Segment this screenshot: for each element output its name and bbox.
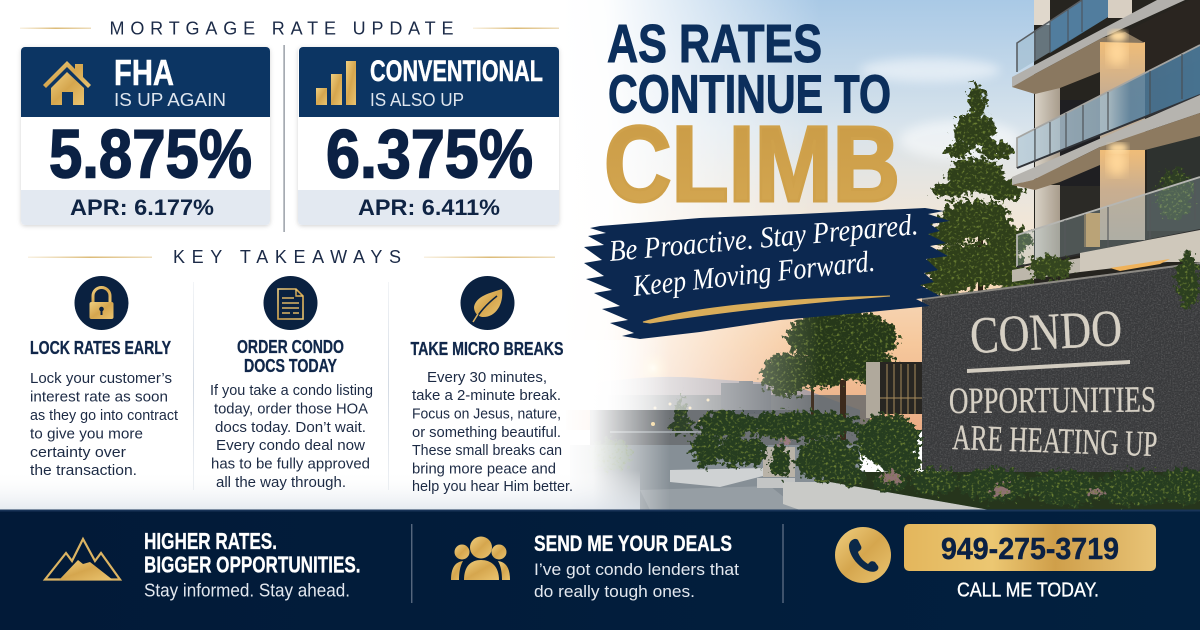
distant hills and city xyxy=(590,377,870,445)
text block: the transaction. xyxy=(30,462,137,479)
divider between cards xyxy=(284,45,285,232)
title: TAKE MICRO BREAKS xyxy=(410,339,564,359)
FHA APR: APR: 6.177% xyxy=(70,195,214,220)
sun xyxy=(636,351,670,385)
white fade: lower xyxy=(560,340,670,510)
icon: document xyxy=(264,276,318,330)
card: FHA xyxy=(21,47,270,225)
card: conventional xyxy=(298,47,559,225)
icon: padlock xyxy=(74,276,128,330)
sky xyxy=(560,0,1200,430)
bottom band xyxy=(0,510,1200,630)
band: call xyxy=(835,524,1156,602)
slab one xyxy=(1012,0,1185,87)
icon: bars xyxy=(316,61,356,105)
band: send me your deals xyxy=(451,531,739,601)
phone number box xyxy=(904,524,1156,571)
main title xyxy=(604,14,900,224)
conventional APR: APR: 6.411% xyxy=(358,195,500,220)
text block xyxy=(412,369,573,495)
subtext xyxy=(534,560,739,601)
stone monument wall xyxy=(922,262,1200,490)
column dividers xyxy=(193,282,194,490)
shrub by wall xyxy=(1028,256,1072,280)
photo: condo building at sunset xyxy=(560,0,1200,510)
white fade: upper xyxy=(560,0,820,410)
band: higher rates xyxy=(45,528,360,600)
subtext: do really tough ones. xyxy=(534,582,695,601)
top balcony xyxy=(1017,0,1108,72)
takeaway: take micro breaks xyxy=(410,276,573,495)
text block: all the way through. xyxy=(216,474,346,491)
left column backdrop xyxy=(0,0,566,510)
wall text: condo: CONDO xyxy=(969,300,1123,365)
piers xyxy=(1035,88,1060,178)
icon: leaf xyxy=(460,276,514,330)
text block: docs today. Don’t wait. xyxy=(215,419,366,436)
hedges and flowers xyxy=(588,411,1200,506)
lower windows xyxy=(1060,186,1100,256)
heading: key takeaways: KEY TAKEAWAYS xyxy=(173,247,401,267)
conventional subtitle: IS ALSO UP xyxy=(370,89,464,110)
slab two xyxy=(1012,95,1200,185)
title xyxy=(237,337,344,376)
conventional rate: 6.375% xyxy=(326,116,533,192)
text block xyxy=(30,370,179,479)
heading: SEND ME YOUR DEALS xyxy=(534,531,732,556)
title: LOCK RATES EARLY xyxy=(30,338,171,358)
wall lettering xyxy=(949,300,1158,464)
text block: Lock your customer’s xyxy=(30,370,172,387)
conventional label: CONVENTIONAL xyxy=(370,55,543,88)
title line: climb: CLIMB xyxy=(604,103,900,224)
garden bed xyxy=(830,472,1200,510)
call to action: CALL ME TODAY. xyxy=(957,580,1099,602)
title: ORDER CONDO xyxy=(237,337,344,357)
text block: These small breaks can xyxy=(412,442,562,459)
third balcony xyxy=(1017,177,1200,267)
icon: mountains xyxy=(45,539,120,580)
climbing plant xyxy=(1176,252,1200,308)
gate xyxy=(866,362,922,418)
text block: Every condo deal now xyxy=(216,437,365,454)
second balcony xyxy=(1017,45,1200,168)
slab three xyxy=(1080,230,1200,272)
takeaway: lock rates early xyxy=(30,276,179,479)
phone number box: 949-275-3719 xyxy=(941,531,1119,566)
text block: interest rate as soon xyxy=(30,388,168,406)
text block: certainty over xyxy=(30,444,126,461)
clouds xyxy=(860,58,1020,160)
top piers xyxy=(1034,0,1050,25)
text block: If you take a condo listing xyxy=(210,382,373,399)
foreground tree xyxy=(762,310,898,440)
script line 2: Keep Moving Forward. xyxy=(630,245,876,303)
takeaway: order condo docs xyxy=(210,276,373,491)
building xyxy=(1012,0,1200,290)
script line 1: Be Proactive. Stay Prepared. xyxy=(608,208,919,268)
pier glows xyxy=(1107,38,1127,66)
heading: mortgage rate update: MORTGAGE RATE UPDATE xyxy=(110,18,454,38)
text block: has to be fully approved xyxy=(211,456,370,472)
text block: help you hear Him better. xyxy=(412,478,573,495)
icon: people xyxy=(451,536,510,580)
brush stroke xyxy=(584,208,950,339)
title line: as rates: AS RATES xyxy=(607,14,822,74)
heading line 2: BIGGER OPPORTUNITIES. xyxy=(144,552,360,578)
text block: Every 30 minutes, xyxy=(427,369,547,386)
interior dark xyxy=(1034,0,1200,290)
text block xyxy=(210,382,373,491)
heading: HIGHER RATES. xyxy=(144,528,277,554)
FHA rate: 5.875% xyxy=(49,116,252,192)
text block: to give you more xyxy=(30,426,143,442)
subtext: Stay informed. Stay ahead. xyxy=(144,580,350,600)
icon: house xyxy=(43,61,91,105)
text block: or something beautiful. xyxy=(412,424,561,441)
text block: Focus on Jesus, nature, xyxy=(412,406,561,422)
planters xyxy=(670,447,1200,510)
text block: take a 2-minute break. xyxy=(412,387,561,404)
text block: as they go into contract xyxy=(30,407,179,424)
text block: today, order those HOA xyxy=(214,400,368,418)
FHA label: FHA xyxy=(114,52,174,93)
icon: phone xyxy=(835,527,891,583)
text block: bring more peace and xyxy=(412,460,556,478)
title: DOCS TODAY xyxy=(244,356,337,376)
FHA subtitle: IS UP AGAIN xyxy=(114,89,226,110)
brush banner xyxy=(584,208,950,339)
ground and walkway xyxy=(570,445,990,510)
subtext: I’ve got condo lenders that xyxy=(534,560,739,579)
wall divider xyxy=(967,360,1130,373)
conifer tree xyxy=(919,84,1035,300)
title line: continue to: CONTINUE TO xyxy=(608,64,891,124)
gold swoosh xyxy=(643,296,890,323)
